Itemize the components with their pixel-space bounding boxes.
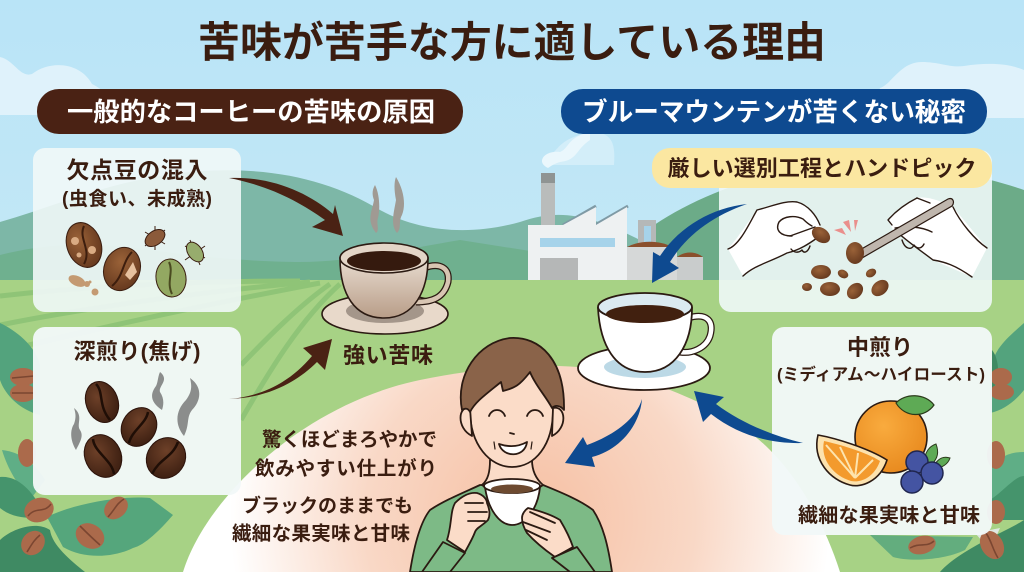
icon: green insect [183,239,207,265]
icon: damaged bean [98,242,146,296]
title: 苦味が苦手な方に適している理由 [198,19,826,66]
cup body [340,258,428,318]
sleeves [422,542,595,572]
heading: general causes of bitterness: 一般的なコーヒーの苦味の原因 [67,97,435,127]
illustration: smiling man drinking coffee [410,338,612,572]
icon: sorted beans [802,265,892,302]
panel heading: 中煎り [847,335,913,360]
text: smooth finish: 飲みやすい仕上がり [255,457,437,480]
icon: red emphasis ticks [834,220,858,235]
icon: left hand holding bean [728,202,833,276]
icon: brown insect [142,226,168,250]
icon: right hand with tweezers [846,197,987,277]
text: smooth finish: 驚くほどまろやかで [262,429,437,451]
background: field [0,280,1024,572]
coffee surface [606,305,684,323]
panel caption: 繊細な果実味と甘味 [798,504,980,527]
text: fruity sweetness even black: 繊細な果実味と甘味 [232,523,410,545]
saucer [322,294,448,334]
ears [460,408,563,436]
cup handle [680,316,711,352]
panel: deep roast [33,327,241,495]
steam [370,177,404,233]
panel heading: 深煎り(焦げ) [74,339,200,364]
panel: hand picking [719,150,992,312]
icon: unripe green bean [154,257,188,299]
arrow: deep roast to bitter coffee [229,339,332,399]
illustration: bitter coffee cup [322,177,448,334]
label: strong bitterness: 強い苦味 [343,343,433,368]
icon: fruit [817,396,950,493]
arrow: hand picking to white cup [652,204,747,283]
text: fruity sweetness even black [232,494,413,545]
label: strict selection and hand picking [652,148,992,188]
icon: crumbs [67,273,98,296]
panel subheading: (ミディアム〜ハイロースト) [777,364,985,384]
coffee surface [347,251,421,271]
icon: burnt smoke [71,372,199,450]
panel subheading: (虫食い、未成熟) [62,187,212,210]
cup handle [416,266,448,302]
arrow: defects to bitter coffee [229,178,343,236]
right hand [522,508,573,557]
panel: medium roast [772,327,992,535]
saucer [578,346,710,390]
panel: defective beans [33,148,241,312]
face [470,370,553,467]
arrow: medium roast to white cup [694,391,803,443]
plants: left coffee branch [0,323,173,572]
cup body [598,308,692,372]
peach glow area [183,366,840,572]
background: sky [0,0,1024,300]
background: distant hills [0,165,1024,290]
heading: general causes of bitterness [37,89,463,134]
hair [461,338,564,412]
sweater [410,485,612,572]
text: fruity sweetness even black: ブラックのままでも [242,494,413,517]
label: strict selection and hand picking: 厳しい選別工程とハンドピック [668,156,976,181]
eyes and mouth [489,410,543,454]
panel heading: 欠点豆の混入 [66,157,208,183]
held cup [485,487,540,525]
left hand [447,493,489,552]
text: smooth finish [255,429,437,480]
neck [482,460,543,492]
heading: why Blue Mountain is not bitter: ブルーマウンテンが苦くない秘密 [582,97,966,127]
icon: insect-eaten bean [60,218,108,272]
clouds [0,57,1024,165]
heading: why Blue Mountain is not bitter [561,89,987,134]
icon: dark beans [77,377,194,486]
factory [528,132,703,280]
plants: right coffee branch [870,323,1024,572]
arrow: white cup to person [565,399,642,467]
illustration: smooth white coffee cup [578,293,711,390]
